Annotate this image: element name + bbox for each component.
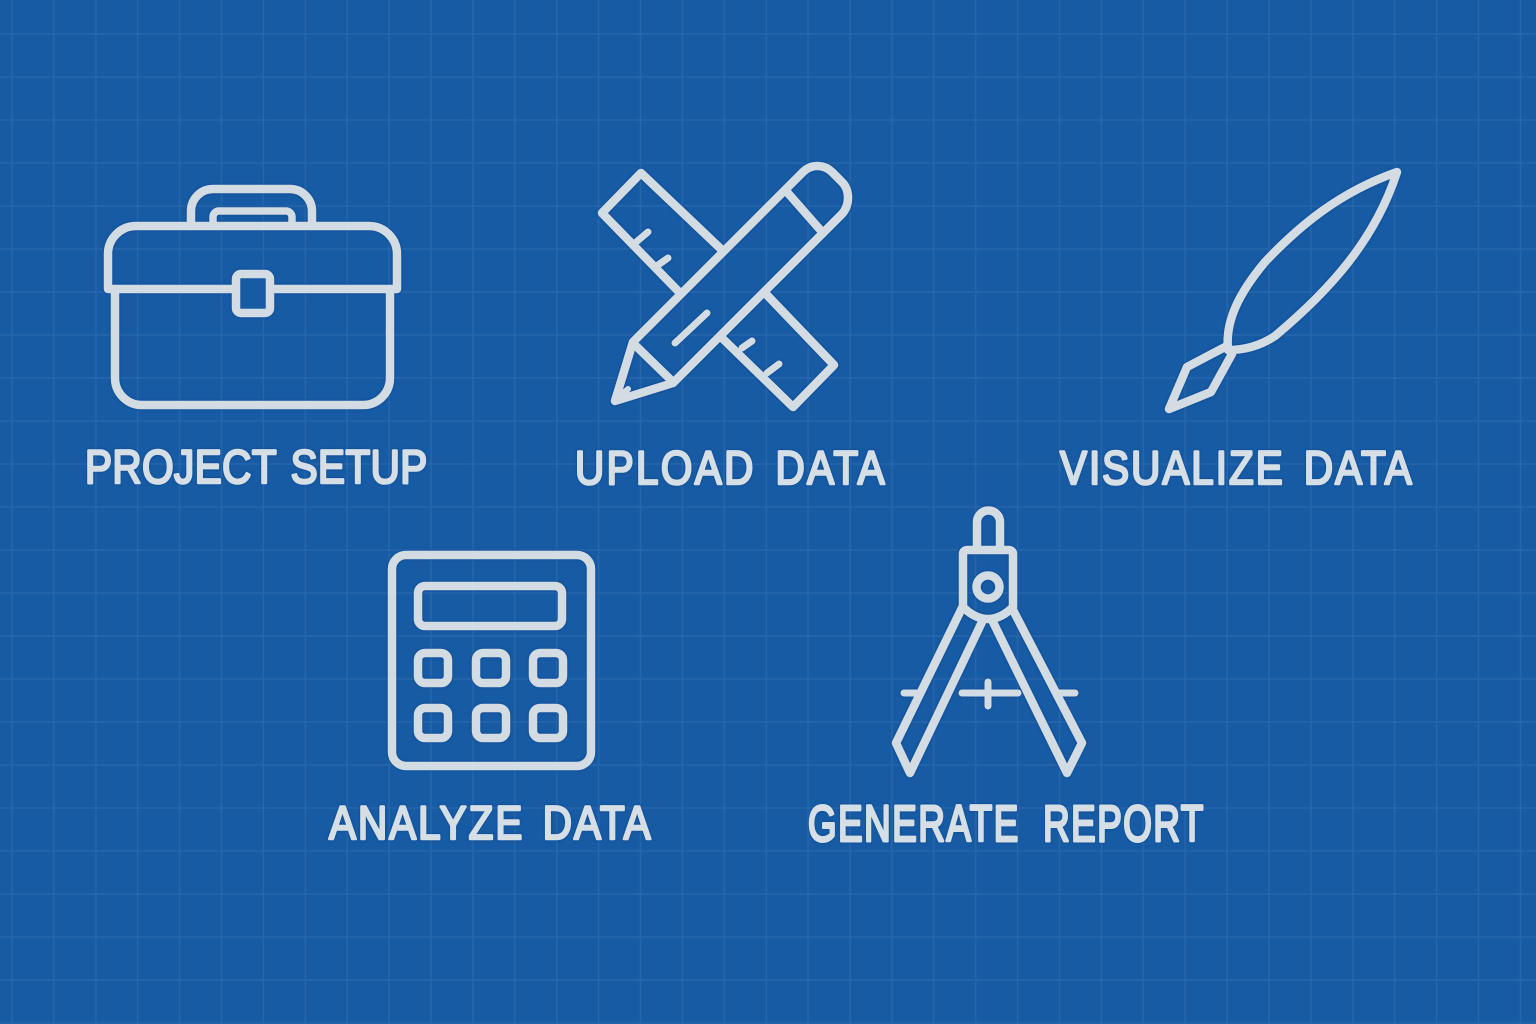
label: upload data: UPLOAD DATA	[575, 442, 885, 495]
icon: briefcase	[108, 189, 397, 405]
icon: feather quill	[1169, 172, 1397, 409]
icon: ruler and pencil	[602, 166, 848, 407]
step: project setup	[85, 189, 427, 494]
label: analyze data: ANALYZE DATA	[329, 797, 651, 850]
step: analyze data	[329, 555, 651, 850]
step: visualize data	[1060, 172, 1412, 495]
step: generate report	[808, 510, 1203, 852]
icon: drafting compass	[896, 510, 1082, 773]
label: visualize data: VISUALIZE DATA	[1060, 442, 1412, 495]
icon: calculator	[392, 555, 591, 766]
step: upload data	[575, 166, 885, 495]
label: generate report: GENERATE REPORT	[808, 796, 1203, 852]
label: project setup: PROJECT SETUP	[85, 441, 427, 494]
